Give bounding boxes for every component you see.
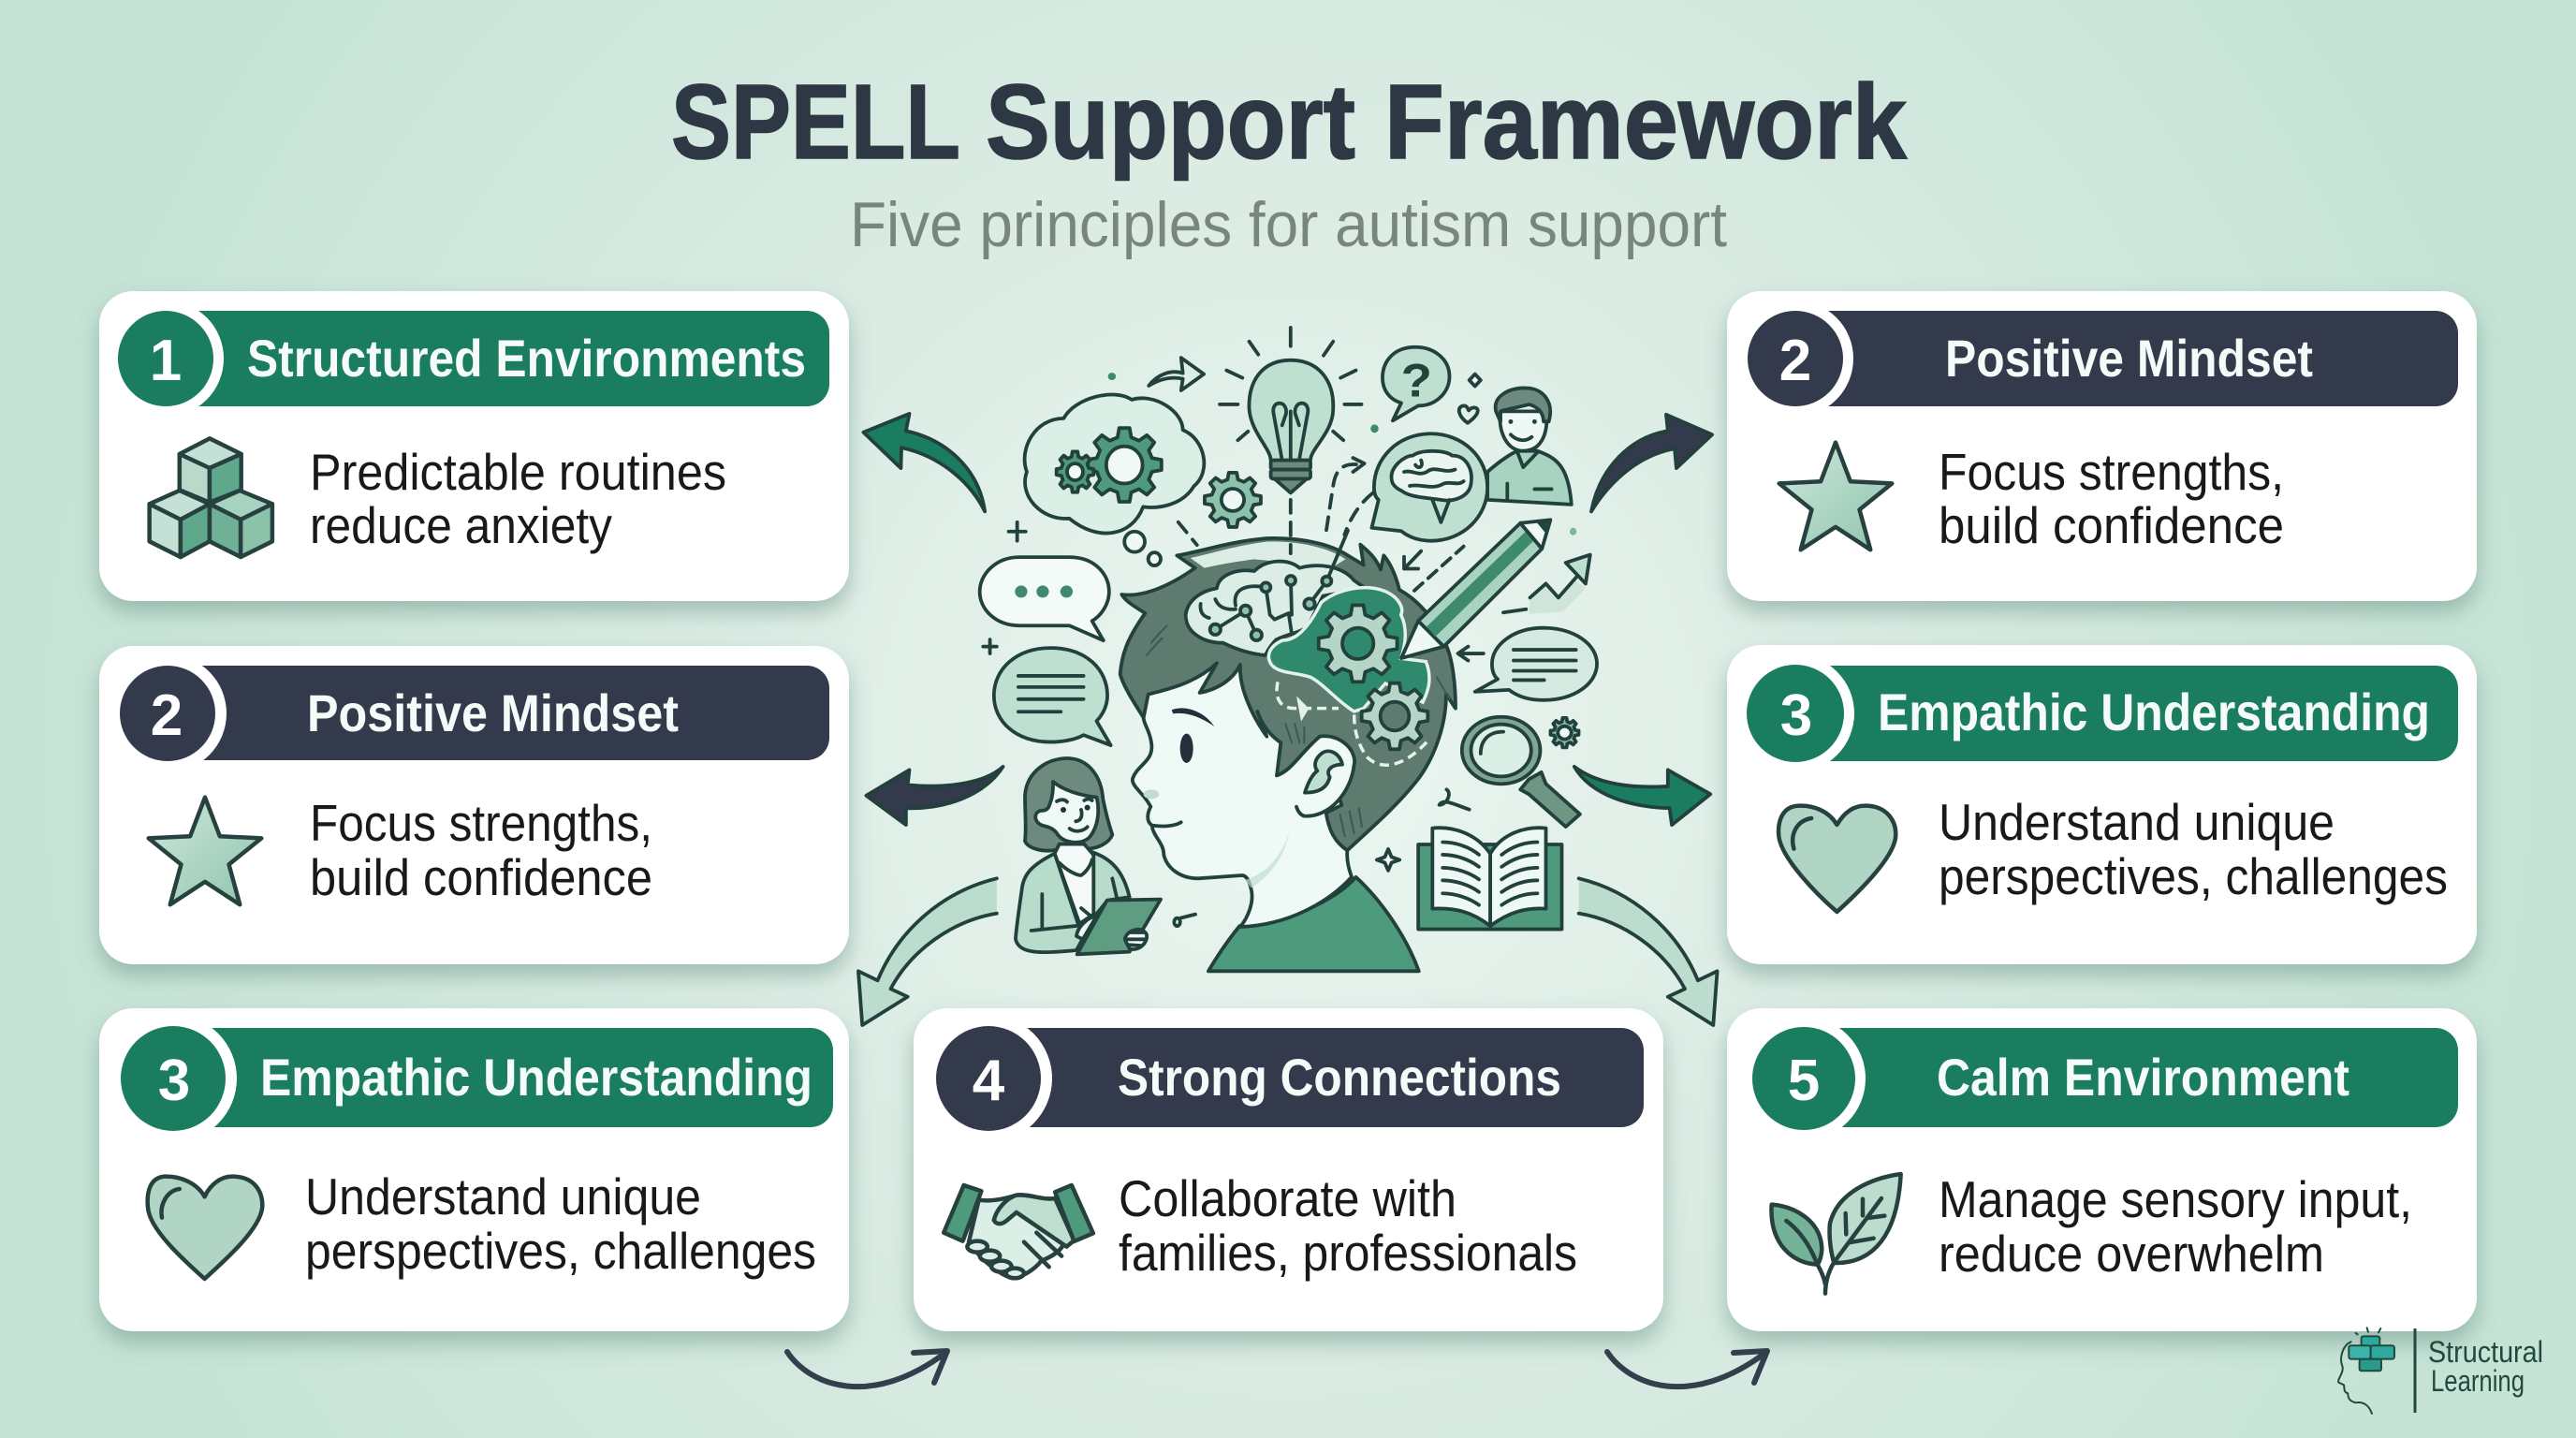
pencil	[1401, 520, 1550, 658]
icon: open book	[1418, 828, 1561, 930]
woman jacket	[1016, 852, 1130, 952]
number badge	[118, 311, 213, 406]
speech bubble: dots	[980, 557, 1109, 640]
small key doodle	[1174, 915, 1195, 926]
icon: star	[149, 798, 261, 904]
panel: 2 Positive Mindset (right): 2	[1779, 329, 1811, 393]
heading: Empathic Understanding	[1878, 682, 2430, 741]
number badge	[936, 1026, 1041, 1131]
panel: 2 Positive Mindset (right)	[1727, 291, 2477, 601]
arrow: mid left to panel 2	[866, 767, 1003, 825]
arrowhead on dashed connector	[1353, 458, 1365, 472]
title: Framework	[1384, 63, 1907, 181]
body text: build confidence	[310, 848, 652, 906]
subtitle: Five principles for autism support	[850, 189, 1727, 260]
heading: Strong Connections	[1118, 1048, 1561, 1107]
icon: handshake	[944, 1185, 1093, 1278]
header bar	[173, 1028, 833, 1127]
ear	[1277, 736, 1354, 816]
thought cloud with gears	[1025, 395, 1204, 565]
dashed connectors to brain	[1178, 464, 1373, 545]
heading: Positive Mindset	[1945, 329, 2313, 388]
person: woman with tablet	[1016, 758, 1161, 954]
speech bubble: lines left	[994, 648, 1111, 745]
arrow: lower left to panel 3	[858, 878, 997, 1025]
body text: reduce anxiety	[310, 496, 612, 554]
face	[1133, 663, 1352, 927]
panel: 5 Calm Environment: 5	[1788, 1049, 1820, 1113]
number badge	[1748, 311, 1843, 406]
question bubble: ?	[1401, 356, 1432, 407]
heading: Positive Mindset	[307, 683, 679, 742]
panel: 3 Empathic Understanding (left): 3	[158, 1049, 190, 1113]
dashed line from bulb	[1289, 500, 1293, 553]
speech bubble: lines right	[1475, 628, 1597, 700]
dashed path arrowhead	[1296, 696, 1309, 722]
logo head and blocks	[2338, 1328, 2394, 1414]
woman hand and pen	[1076, 908, 1097, 939]
panel: 5 Calm Environment	[1727, 1008, 2477, 1331]
heading: Empathic Understanding	[260, 1048, 812, 1107]
boy: shirt	[1208, 877, 1419, 971]
number badge	[121, 1026, 226, 1131]
squiggle	[1440, 789, 1470, 810]
body text: Manage sensory input,	[1939, 1170, 2412, 1228]
body text: Focus strengths,	[1939, 443, 2284, 501]
smile	[1152, 822, 1181, 826]
title: Support	[986, 63, 1355, 181]
brow	[1172, 708, 1214, 726]
body text: build confidence	[1939, 496, 2284, 554]
woman right hand	[1125, 930, 1147, 949]
panel: 3 Empathic Understanding (right): 3	[1780, 683, 1812, 748]
dashed arrow by pencil	[1414, 547, 1464, 591]
body text: Focus strengths,	[310, 794, 652, 852]
logo wordmark: Learning	[2431, 1364, 2525, 1398]
panel: 3 Empathic Understanding (right)	[1727, 645, 2477, 964]
rising chart arrow	[1503, 555, 1590, 614]
dashed path	[1277, 682, 1429, 765]
body text: perspectives, challenges	[305, 1222, 816, 1280]
icon: magnifying glass	[1462, 717, 1580, 827]
body text: perspectives, challenges	[1939, 847, 2448, 905]
gear: large	[1319, 605, 1398, 682]
icon: leaves	[1771, 1174, 1901, 1294]
icon: heart	[1778, 806, 1895, 912]
dots and sparkles	[983, 373, 1576, 871]
body text: Predictable routines	[310, 443, 726, 501]
gear: free	[1205, 473, 1261, 527]
arrow: panel 3 to panel 4	[787, 1351, 947, 1387]
nose shadow	[1144, 789, 1159, 799]
header bar	[1804, 1028, 2458, 1127]
arrow: panel 4 to panel 5	[1607, 1351, 1767, 1387]
central illustration	[858, 328, 1718, 1025]
number badge	[1747, 665, 1844, 762]
body text: families, professionals	[1119, 1224, 1577, 1282]
boy: head	[1120, 531, 1456, 927]
body text: Understand unique	[1939, 793, 2334, 851]
woman shirt and neck	[1055, 844, 1093, 924]
body text: Collaborate with	[1119, 1169, 1456, 1227]
title: SPELL	[671, 63, 960, 181]
body text: Understand unique	[305, 1167, 701, 1225]
panel: 2 Positive Mindset (left): 2	[151, 683, 183, 748]
person: man top right	[1487, 388, 1572, 505]
header bar	[1795, 311, 2458, 406]
panel: 4 Strong Connections: 4	[973, 1049, 1005, 1113]
heading: Structured Environments	[247, 329, 806, 388]
panel: 3 Empathic Understanding (left)	[99, 1008, 849, 1331]
gear: small	[1362, 683, 1427, 749]
arrow: lower right to panel 5	[1579, 878, 1718, 1025]
logo: Structural Learning	[2338, 1328, 2543, 1414]
header bar	[168, 666, 829, 760]
panel: 4 Strong Connections	[914, 1008, 1663, 1331]
brain	[1186, 531, 1365, 655]
hair	[1120, 538, 1456, 850]
gear: tiny	[1551, 718, 1579, 747]
eye	[1180, 734, 1193, 763]
header bar	[1795, 666, 2458, 761]
logo wordmark: Structural	[2428, 1335, 2543, 1369]
woman hair	[1025, 758, 1112, 851]
panel: 1 Structured Environments	[99, 291, 849, 601]
heading: Calm Environment	[1937, 1048, 2349, 1107]
question bubble	[1383, 347, 1449, 420]
brain speech bubble	[1371, 433, 1487, 541]
icon: cubes	[150, 438, 272, 557]
arrows by pencil	[1404, 551, 1484, 661]
tablet	[1077, 900, 1161, 954]
icon: heart	[148, 1177, 262, 1279]
icon: light bulb	[1220, 328, 1362, 492]
arrow: top right to panel 2	[1591, 415, 1712, 511]
body text: reduce overwhelm	[1939, 1225, 2324, 1283]
header bar	[988, 1028, 1644, 1127]
green mind region	[1268, 588, 1429, 712]
small arrow top	[1149, 358, 1204, 390]
hair strands	[1147, 625, 1449, 836]
jaw shading	[1245, 831, 1289, 888]
number badge	[120, 666, 215, 761]
icon: star	[1779, 443, 1892, 550]
arrow: mid right to panel 3	[1574, 767, 1710, 825]
woman face	[1035, 782, 1098, 843]
hair highlight	[1191, 542, 1345, 568]
arrow: top left to panel 1	[863, 414, 985, 511]
header bar	[166, 311, 829, 406]
panel: 2 Positive Mindset (left)	[99, 646, 849, 964]
number badge	[1752, 1027, 1855, 1130]
panel: 1 Structured Environments: 1	[150, 329, 182, 393]
